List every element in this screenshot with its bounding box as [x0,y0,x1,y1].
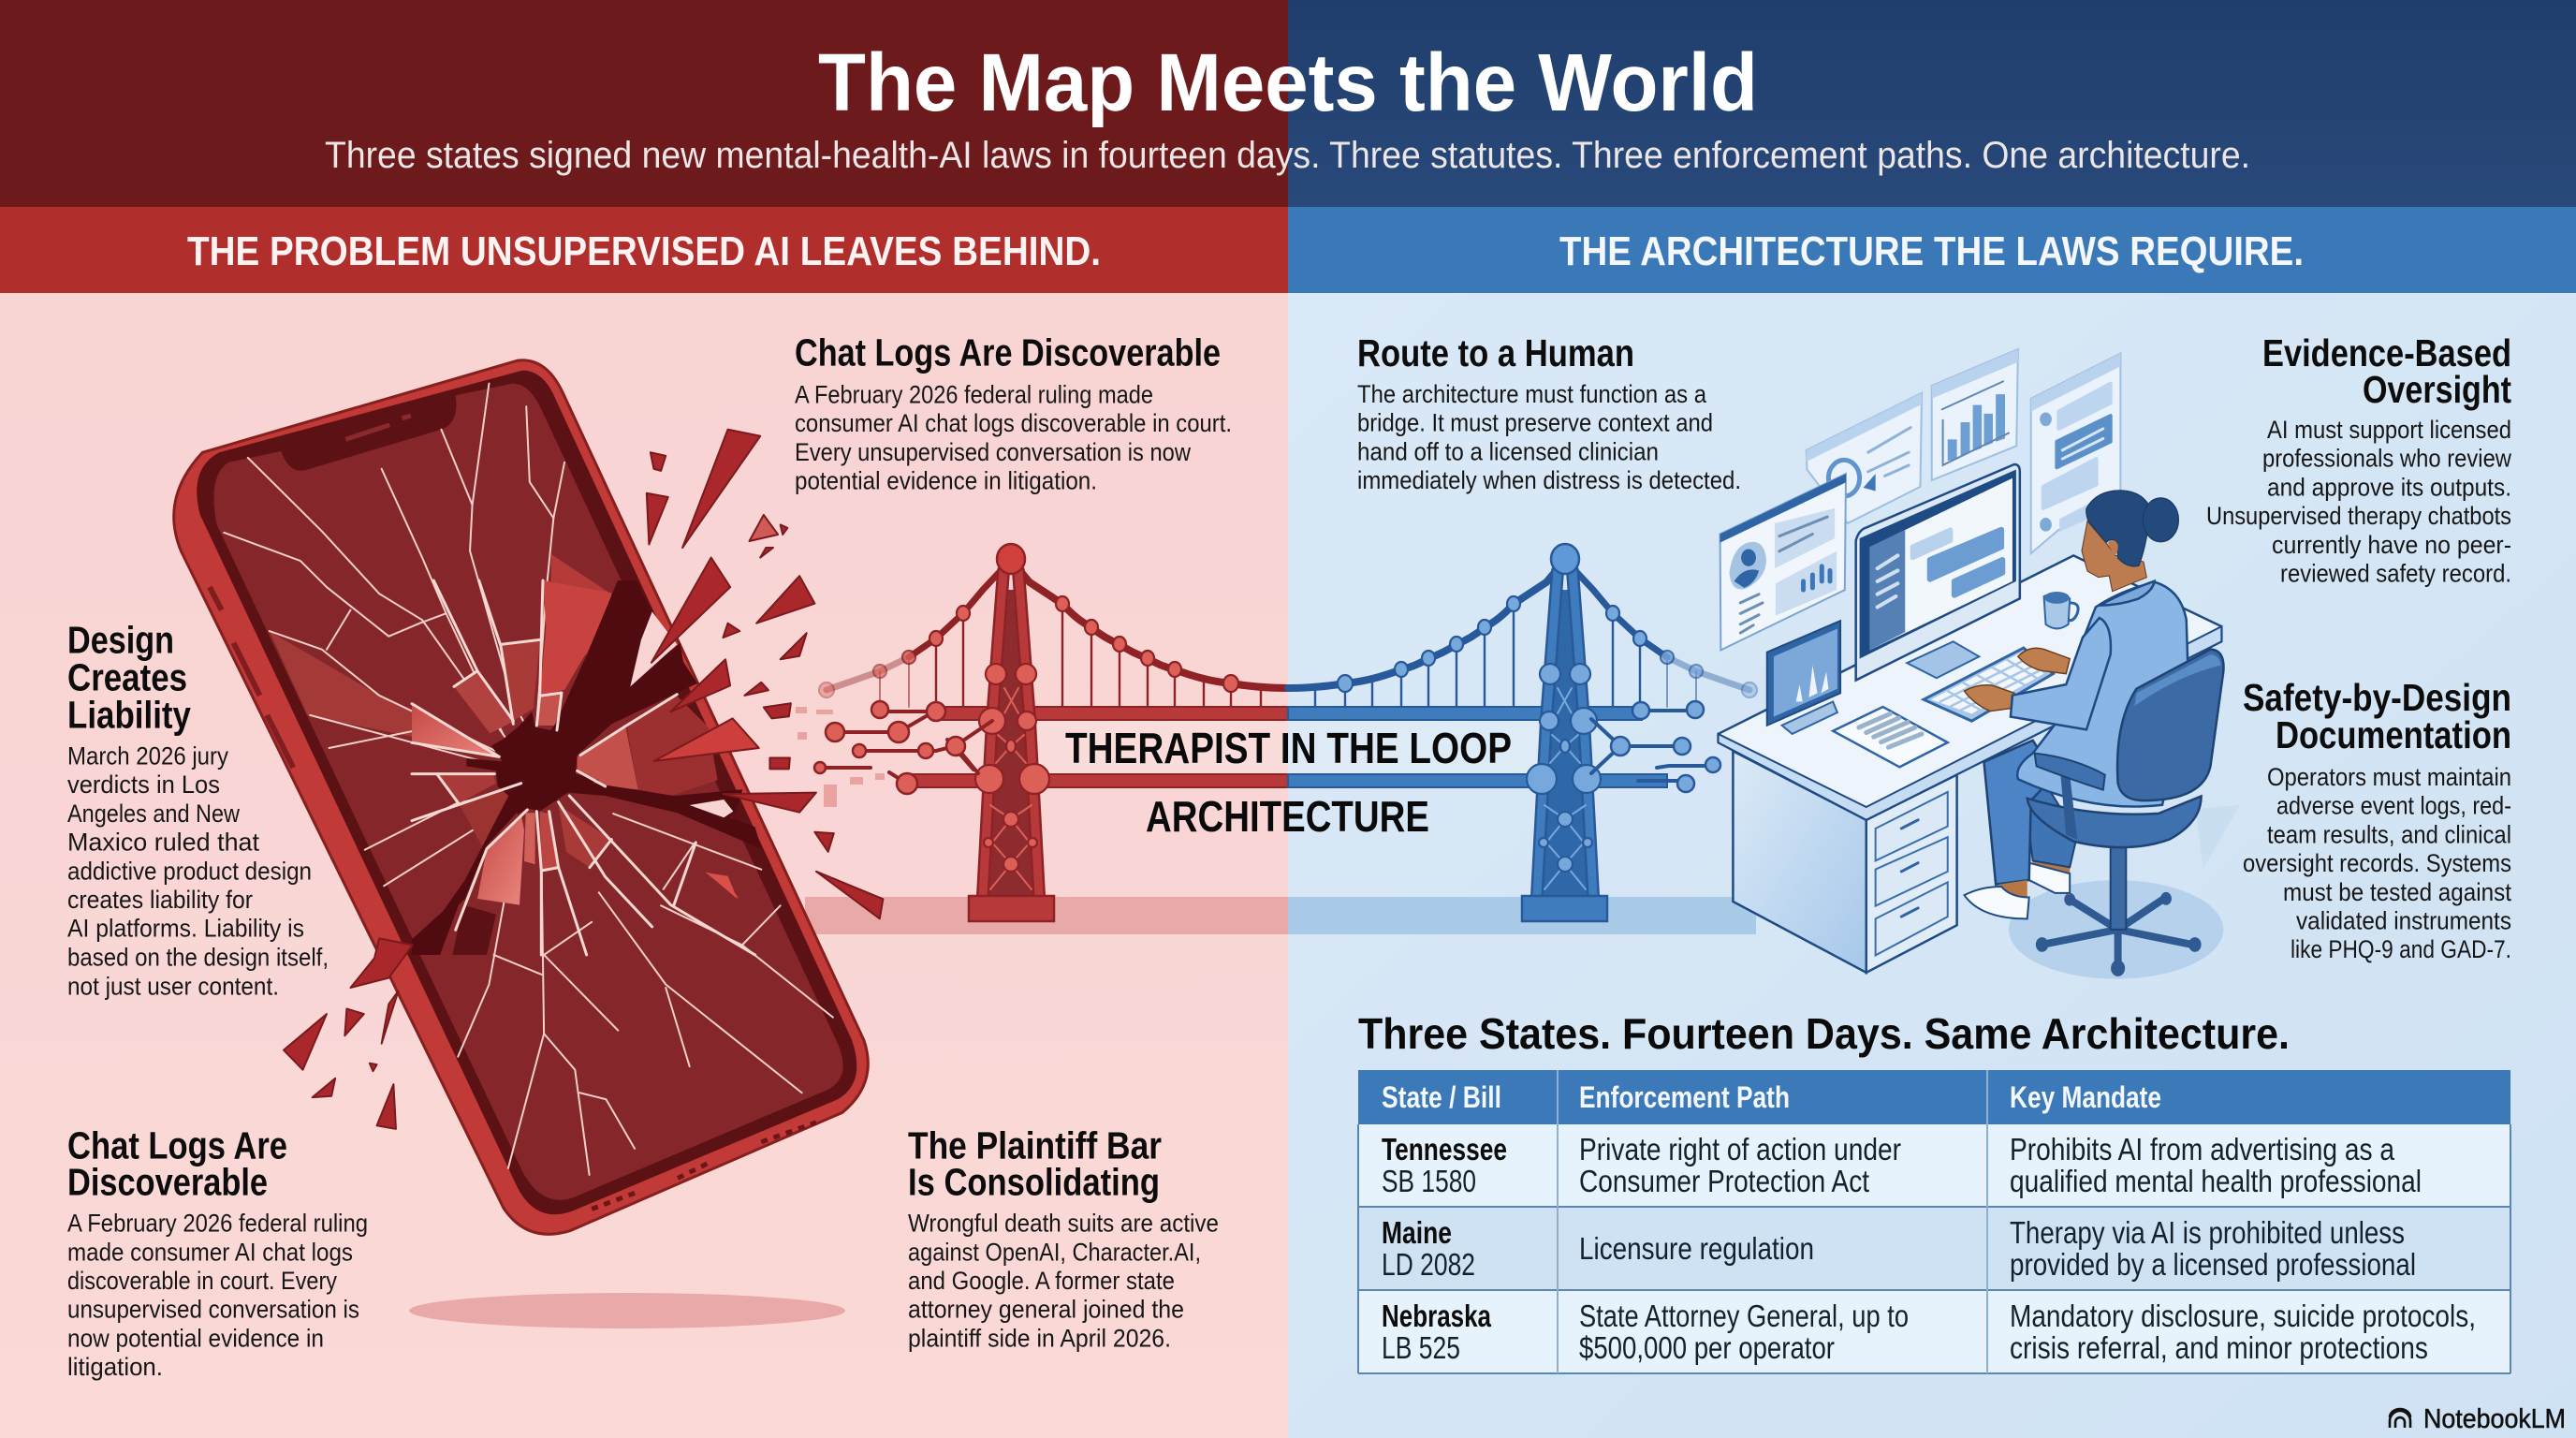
table header row [1382,1080,2161,1114]
table row: Tennessee: Tennessee [1382,1132,1507,1167]
table row: Tennessee [1382,1132,2422,1198]
text block: plaintiff bar: plaintiff side in April 2026. [908,1324,1171,1352]
table row: Tennessee: Private right of action under [1579,1132,1901,1167]
table rows background [1358,1070,2510,1373]
collar [2100,581,2155,606]
text block: evidence-based oversight [2206,331,2511,588]
bridge: blue half [1288,544,1757,921]
text block: evidence-based oversight: Evidence-Based [2262,331,2511,374]
table row: Nebraska: Mandatory disclosure, suicide protocols, [2010,1299,2476,1333]
text block: evidence-based oversight: currently have no peer- [2272,531,2511,559]
table row: Tennessee: Consumer Protection Act [1579,1164,1869,1198]
text block: safety-by-design documentation: must be tested against [2283,878,2511,906]
radial pale cracks [412,580,755,955]
title: The Map Meets the World [818,37,1758,128]
text block: chat logs (bottom): litigation. [67,1353,163,1381]
text block: chat logs (top): A February 2026 federal ruling made [795,380,1153,408]
table row: Tennessee: SB 1580 [1382,1164,1476,1198]
text block: chat logs (top): Chat Logs Are Discoverable [795,331,1221,374]
text block: chat logs (top): potential evidence in litigation. [795,466,1097,494]
illustration: suspension bridge [796,544,1757,921]
NotebookLM logo: NotebookLM [2423,1404,2566,1434]
lit glass wedges [412,580,739,905]
table row: Nebraska: State Attorney General, up to [1579,1299,1909,1333]
person: legs and shoes [1965,741,2077,918]
text block: design creates liability: Design [67,618,174,661]
text block: plaintiff bar [908,1123,1219,1352]
table row: Maine: LD 2082 [1382,1247,1475,1282]
desk [1719,555,2221,973]
section banner: problem: THE PROBLEM UNSUPERVISED AI LEAVES BEHIND. [187,228,1101,274]
text block: plaintiff bar: and Google. A former state [908,1267,1175,1295]
red circuit nodes [796,701,992,807]
bridge label: ARCHITECTURE [1146,792,1429,841]
bridge label [1065,724,1512,841]
text block: chat logs (top): Every unsupervised conversation is now [795,438,1191,466]
text block: evidence-based oversight: reviewed safety record. [2280,560,2511,588]
tablet [1767,621,1840,734]
text block: design creates liability: AI platforms. Liability is [67,914,304,942]
text block: chat logs (bottom): Discoverable [67,1161,268,1204]
table row: Maine: Maine [1382,1215,1452,1250]
text block: chat logs (bottom): Chat Logs Are [67,1123,287,1167]
text block: route to a human: hand off to a licensed clinician [1357,437,1659,465]
person: arm [2011,618,2111,729]
background: left problem side [0,293,1288,1438]
text block: route to a human: immediately when distress is detected. [1357,466,1741,494]
floating panel: bar chart [1932,349,2018,480]
chair back and armrest [2035,649,2224,839]
blue circuit nodes [1591,701,1720,792]
text block: evidence-based oversight: Oversight [2363,368,2511,411]
text block: design creates liability [67,618,329,1000]
text block: route to a human: Route to a Human [1357,331,1634,374]
table row: Nebraska: LB 525 [1382,1330,1460,1365]
dark impact hole and rips [412,580,761,955]
text block: plaintiff bar: attorney general joined the [908,1296,1184,1324]
table row: Maine [1382,1215,2416,1282]
table row: Nebraska: $500,000 per operator [1579,1330,1835,1365]
text block: design creates liability: addictive product design [67,857,312,885]
document on desk [1833,707,1948,767]
illustration: therapist at desk [1719,349,2240,979]
text block: safety-by-design documentation: adverse event logs, red- [2276,792,2511,820]
ground band under bridge [805,897,1756,934]
shatter centre: impact and lit wedges [412,580,761,955]
floating panel: dashboard [1807,393,1922,523]
text block: chat logs (bottom): now potential evidence in [67,1324,324,1352]
text block: safety-by-design documentation: oversight records. Systems [2243,849,2511,877]
person: torso [2017,582,2188,807]
person: head and collar [2082,491,2178,606]
hair bun [2143,498,2178,542]
text block: safety-by-design documentation: Documentation [2276,713,2511,756]
text block: safety-by-design documentation [2243,676,2511,963]
chair wheels and base [2036,845,2202,976]
side buttons [210,587,293,768]
text block: plaintiff bar: The Plaintiff Bar [908,1123,1162,1167]
bottom speaker holes [592,1123,816,1209]
phone shadow [409,1293,845,1328]
text block: plaintiff bar: against OpenAI, Character.AI, [908,1238,1201,1266]
text block: evidence-based oversight: and approve its outputs. [2267,473,2511,501]
text block: evidence-based oversight: professionals who review [2262,445,2511,473]
text block: safety-by-design documentation: Safety-by-Design [2243,676,2511,719]
tinted glass fragments [270,554,738,899]
speaker notch details [345,416,411,439]
floating panel: chat [2031,354,2120,553]
icon: notebook arcs [2390,1409,2410,1428]
section banner: architecture [1288,207,2576,293]
chair shadow [2009,880,2223,979]
table row: Maine: Licensure regulation [1579,1231,1814,1266]
text block: design creates liability: Angeles and New [67,800,240,828]
text block: evidence-based oversight: Unsupervised therapy chatbots [2206,502,2511,530]
text block: safety-by-design documentation: validated instruments [2296,906,2511,934]
section banner: problem [0,207,1288,293]
table header row: State / Bill [1382,1080,1501,1114]
phone screen [213,384,843,1200]
bridge: red half [819,544,1288,921]
monitor [1856,464,2020,681]
table row: Tennessee: Prohibits AI from advertising as a [2010,1132,2395,1167]
table row: Nebraska: Nebraska [1382,1299,1491,1333]
table heading: Three States. Fourteen Days. Same Architecture. [1358,1009,2290,1058]
text block: design creates liability: creates liability for [67,886,253,914]
keyboard [1924,648,2053,721]
table header row: Key Mandate [2010,1080,2161,1114]
desk left side [1733,751,1866,973]
floating panel: patient profile [1720,474,1846,650]
background: right architecture side [1288,293,2576,1438]
text block: plaintiff bar: Wrongful death suits are active [908,1210,1219,1238]
text block: route to a human: bridge. It must preserve context and [1357,409,1713,437]
hair [2086,491,2150,566]
section banner: architecture: THE ARCHITECTURE THE LAWS REQUIRE. [1559,228,2304,274]
text block: design creates liability: Creates [67,655,187,698]
table row: Maine: provided by a licensed professional [2010,1247,2416,1282]
text block: design creates liability: verdicts in Los [67,770,220,799]
table header row: Enforcement Path [1579,1080,1790,1114]
text block: chat logs (bottom) [67,1123,368,1381]
table: state laws [1358,1070,2510,1373]
crack lines [224,384,833,1175]
phone body [174,360,868,1234]
ear [2108,540,2118,555]
desktop surface [1719,555,2221,820]
text block: evidence-based oversight: AI must support licensed [2267,416,2511,444]
flying glass shards [284,430,883,1129]
text block: design creates liability: March 2026 jury [67,741,228,770]
text block: chat logs (top) [795,331,1232,494]
text block: route to a human [1357,331,1741,494]
table row: Maine: Therapy via AI is prohibited unless [2010,1215,2405,1250]
illustration: shattered phone [174,360,868,1234]
text block: safety-by-design documentation: like PHQ-9 and GAD-7. [2291,935,2511,963]
subtitle: Three states signed new mental-health-AI laws in fourteen days. Three statutes. Three enforcement paths. One architecture. [325,135,2250,176]
text block: safety-by-design documentation: Operators must maintain [2267,763,2511,791]
table row: Nebraska: crisis referral, and minor protections [2010,1330,2428,1365]
text block: route to a human: The architecture must function as a [1357,380,1707,408]
text block: chat logs (bottom): A February 2026 federal ruling [67,1210,368,1238]
text block: chat logs (bottom): unsupervised conversation is [67,1296,359,1324]
floor shadow [2196,805,2240,870]
text block: chat logs (top): consumer AI chat logs discoverable in court. [795,409,1232,437]
face and neck [2082,521,2146,592]
desk drawers [1866,775,1957,973]
broken phone edge [630,611,677,686]
header band [0,0,2576,207]
text block: design creates liability: based on the design itself, [67,944,329,972]
person: hands [1965,648,2070,712]
text block: design creates liability: Liability [67,693,191,736]
text block: safety-by-design documentation: team results, and clinical [2267,820,2511,848]
bridge label: THERAPIST IN THE LOOP [1065,724,1512,772]
monitor stand [1907,641,1979,678]
text block: design creates liability: not just user content. [67,972,279,1000]
coffee mug [2044,592,2078,628]
text block: chat logs (bottom): discoverable in court. Every [67,1267,337,1295]
table row: Tennessee: qualified mental health professional [2010,1164,2422,1198]
chair seat [2027,797,2202,847]
text block: design creates liability: Maxico ruled that [67,828,259,856]
text block: chat logs (bottom): made consumer AI chat logs [67,1238,353,1266]
text block: plaintiff bar: Is Consolidating [908,1161,1160,1204]
table row: Nebraska [1382,1299,2476,1365]
